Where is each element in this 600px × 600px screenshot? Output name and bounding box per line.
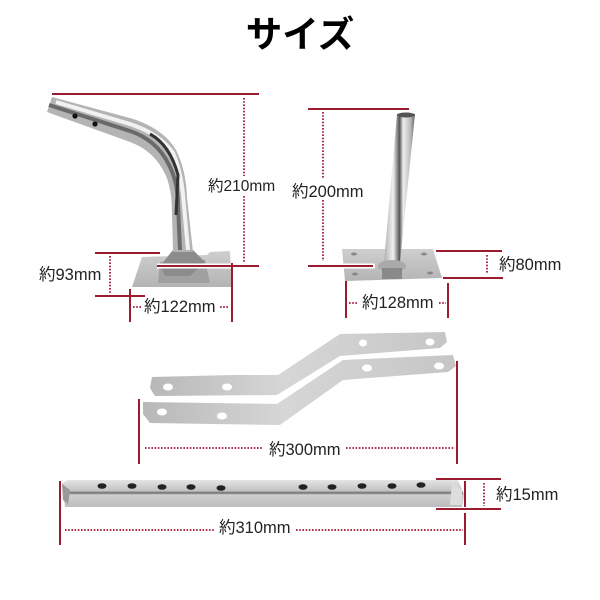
front bar xyxy=(143,355,456,425)
dimension: bars length 300: 約300mm xyxy=(269,440,341,459)
dimension: bent mount depth 93: 約93mm xyxy=(39,265,101,284)
square rail photo xyxy=(62,480,464,507)
dimension: bent mount depth 93 xyxy=(39,253,160,296)
title: サイズ xyxy=(246,14,354,55)
straight mount photo xyxy=(342,112,442,281)
dimension: bent mount width 122 xyxy=(130,263,232,322)
dimension: straight mount width 128: 約128mm xyxy=(362,293,434,312)
bar holes xyxy=(157,338,444,420)
dimension: rail height 15 xyxy=(436,479,558,509)
pair of offset bars photo xyxy=(143,332,456,425)
back bar xyxy=(150,332,447,396)
dimension: straight mount depth 80: 約80mm xyxy=(499,255,561,274)
tube holes xyxy=(72,113,78,119)
square plate xyxy=(342,249,442,281)
dimension: straight mount depth 80 xyxy=(436,251,561,278)
dimension: bent mount height 210: 約210mm xyxy=(208,177,275,195)
bent mount photo xyxy=(47,97,232,287)
rail holes xyxy=(98,482,426,491)
dimension: rail length 310: 約310mm xyxy=(219,518,291,537)
base plate xyxy=(132,251,232,287)
dimension: bent mount width 122: 約122mm xyxy=(144,297,216,316)
straight tube xyxy=(384,114,415,262)
dimension: straight mount height 200: 約200mm xyxy=(292,182,364,201)
dimension: straight mount width 128 xyxy=(346,281,448,318)
dimension: rail height 15: 約15mm xyxy=(496,485,558,504)
bent tube xyxy=(47,97,193,252)
